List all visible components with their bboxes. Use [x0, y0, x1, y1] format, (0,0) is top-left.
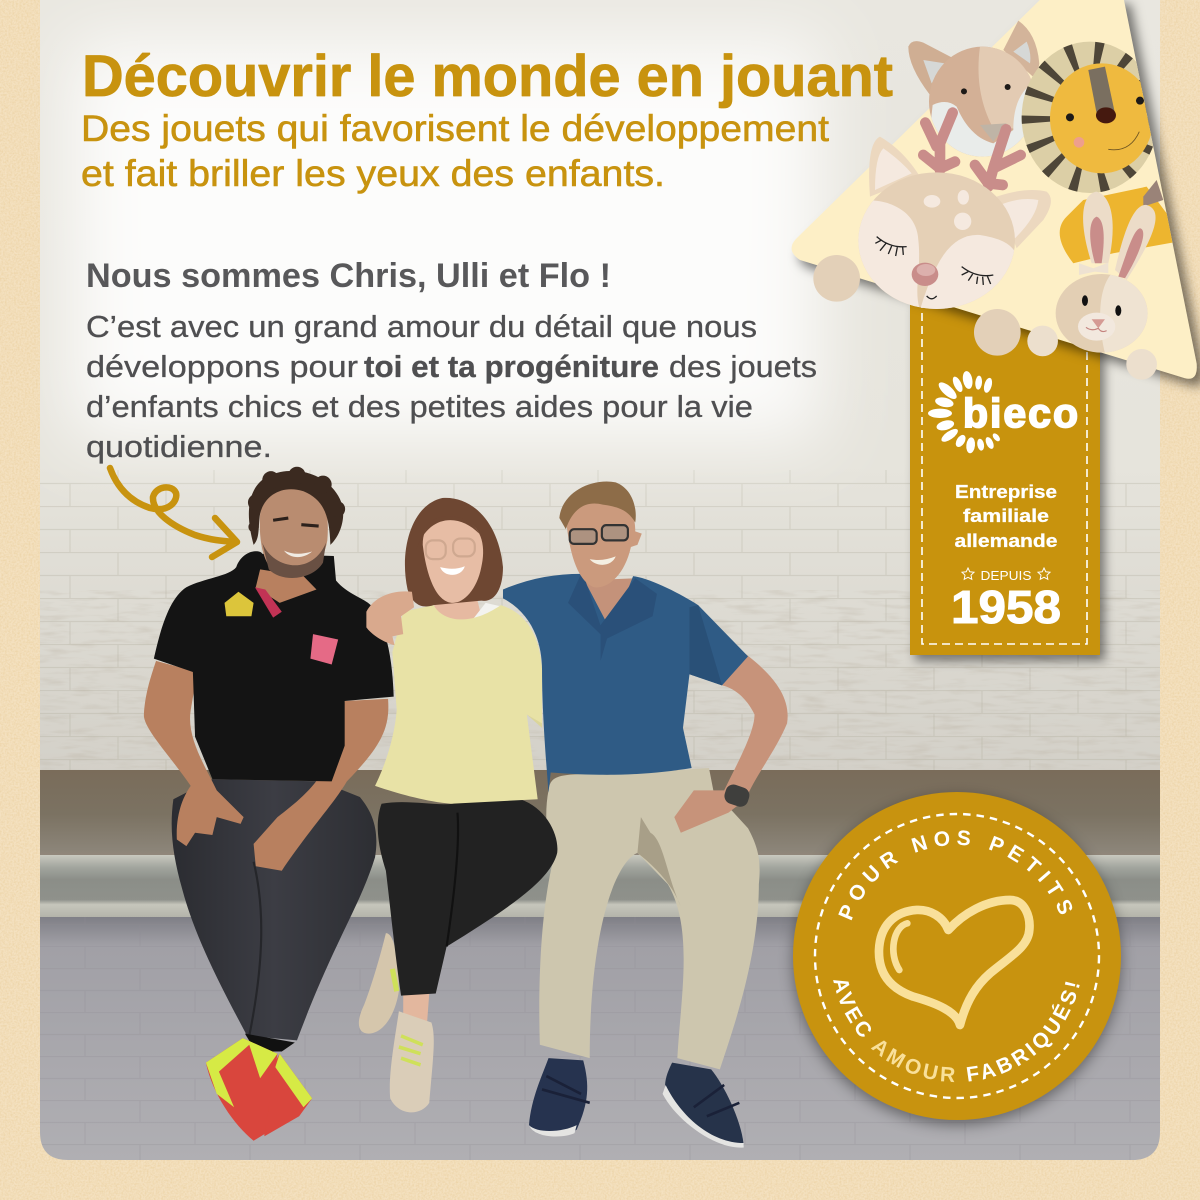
body text [86, 309, 817, 464]
triangle with animals [792, 0, 1197, 380]
depuis: DEPUIS [980, 568, 1032, 583]
curly arrow to Chris [110, 468, 237, 557]
body text: C’est avec un grand amour du détail que nous [86, 309, 757, 344]
yellow triangle [792, 0, 1197, 379]
person: middle woman [359, 498, 557, 1112]
tagline [954, 482, 1058, 551]
subtitle: Des jouets qui favorisent le développement [81, 108, 830, 149]
body text: développons pour [86, 349, 358, 384]
person: right man [503, 482, 788, 1148]
tagline: familiale [963, 506, 1049, 526]
bieco logo [928, 370, 1078, 454]
person: left man [144, 467, 394, 1141]
icon: rabbit [1055, 192, 1156, 353]
badge: made with love [786, 790, 1128, 1133]
icon: fox [908, 21, 1047, 160]
body text: d’enfants chics et des petites aides pour la vie [86, 389, 753, 424]
paws [813, 255, 1157, 380]
year 1958: 1958 [951, 581, 1061, 633]
team of three people [144, 467, 788, 1148]
tagline: allemande [954, 531, 1058, 551]
white glow behind text [70, 40, 820, 440]
ledge top [40, 770, 1160, 858]
icon: heart [879, 900, 1029, 1025]
subtitle [81, 108, 830, 194]
heading: who we are: Nous sommes Chris, Ulli et Flo ! [86, 257, 611, 295]
bottom arc text: AVEC AMOUR FABRIQUÉS! [833, 980, 1080, 1082]
top arc text: POUR NOS PETITS [838, 830, 1072, 920]
title: Découvrir le monde en jouant [82, 44, 893, 109]
body text: des jouets [669, 349, 817, 384]
woman's hand on shoulder [366, 591, 414, 645]
bieco logo: bieco [963, 390, 1078, 436]
ribbon: bieco family company [910, 300, 1100, 655]
brick wall [40, 0, 1160, 775]
lower brick wall [40, 917, 1160, 1160]
tagline: Entreprise [955, 482, 1057, 502]
icon: lion [1040, 60, 1187, 263]
body text: quotidienne. [86, 429, 272, 464]
body text: toi et ta progéniture [364, 349, 659, 384]
depuis [962, 568, 1050, 583]
subtitle: et fait briller les yeux des enfants. [81, 153, 665, 194]
ledge front [40, 855, 1160, 917]
icon: deer [857, 113, 1051, 310]
